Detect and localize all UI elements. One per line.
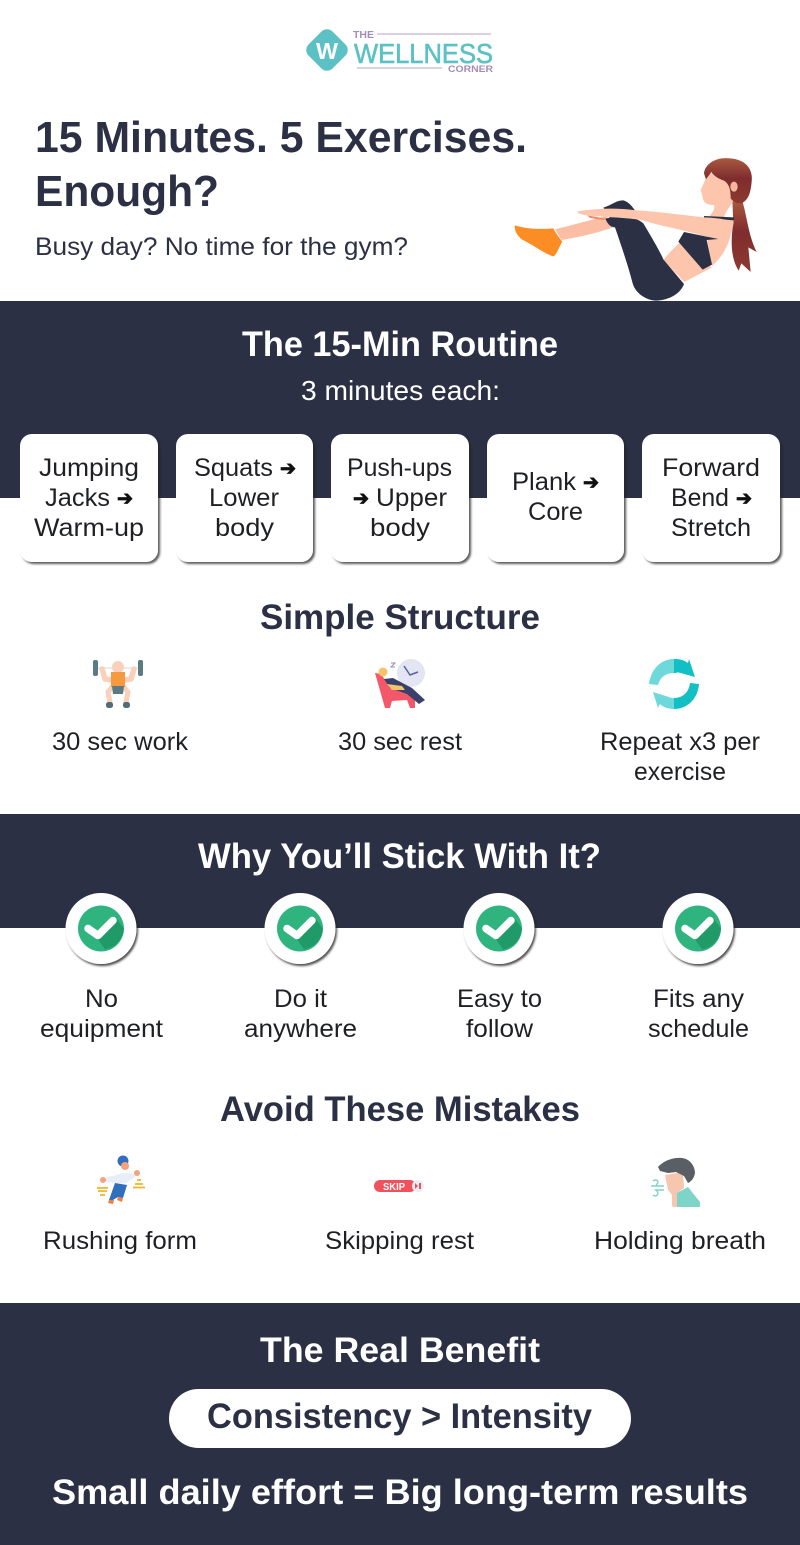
text: easy to follow: Easy to bbox=[457, 985, 542, 1013]
text: 30 sec work: 30 sec work bbox=[52, 728, 189, 756]
heading: The 15-Min Routine: The 15-Min Routine bbox=[242, 325, 558, 364]
card: squats: Squats bbox=[194, 454, 273, 482]
band: why stick bbox=[0, 814, 800, 928]
subtitle: Busy day? No time for the gym? bbox=[35, 233, 408, 261]
logo bbox=[303, 26, 494, 74]
heading: Avoid These Mistakes: Avoid These Mistakes bbox=[220, 1090, 580, 1129]
card: jumping jacks: Warm-up bbox=[34, 514, 144, 542]
text: holding breath: Holding breath bbox=[594, 1227, 766, 1255]
text: fits any schedule: Fits any bbox=[653, 985, 745, 1013]
icon: check badge 1 bbox=[66, 893, 136, 964]
text: do it anywhere: Do it bbox=[274, 985, 327, 1013]
band: benefit bbox=[0, 1303, 800, 1545]
card: push-ups bbox=[331, 434, 469, 562]
icon: skip button: SKIP bbox=[383, 1182, 405, 1193]
card: squats bbox=[176, 434, 313, 562]
logo wordmark: THE bbox=[353, 30, 374, 41]
heading: Why You'll Stick With It: Why You’ll Stick With It? bbox=[198, 837, 601, 876]
text: no equipment: No bbox=[85, 985, 118, 1013]
card: jumping jacks bbox=[20, 434, 158, 562]
card: jumping jacks: ➔ bbox=[117, 486, 133, 510]
card: push-ups: Upper bbox=[376, 484, 447, 512]
icon: weightlifter bbox=[93, 660, 143, 708]
heading: The Real Benefit: The Real Benefit bbox=[260, 1331, 540, 1370]
logo wordmark: CORNER bbox=[448, 64, 494, 74]
icon: check badge 4 bbox=[662, 893, 734, 964]
text: do it anywhere bbox=[244, 985, 357, 1043]
text: 3 minutes each: 3 minutes each: bbox=[301, 375, 500, 406]
card: forward bend: ➔ bbox=[736, 486, 752, 510]
card: plank: Core bbox=[528, 498, 583, 526]
card: forward bend: Bend bbox=[671, 484, 729, 512]
text: easy to follow: follow bbox=[466, 1015, 534, 1043]
card: push-ups: ➔ bbox=[353, 486, 369, 510]
icon: check badge 2 bbox=[264, 893, 336, 964]
text: fits any schedule bbox=[648, 985, 749, 1043]
icon: logo diamond bbox=[303, 26, 351, 74]
card: squats: Lower bbox=[209, 484, 279, 512]
illustration: woman doing v-sit bbox=[515, 158, 757, 301]
logo wordmark bbox=[353, 30, 494, 74]
card: squats: ➔ bbox=[280, 456, 296, 480]
card: squats: body bbox=[215, 514, 275, 542]
text: conclusion: Small daily effort = Big long-term results bbox=[52, 1473, 748, 1512]
card: forward bend: Stretch bbox=[671, 514, 751, 542]
text: skipping rest: Skipping rest bbox=[325, 1227, 474, 1255]
icon: rushing runner bbox=[97, 1156, 145, 1204]
card: forward bend: Forward bbox=[662, 454, 760, 482]
text: repeat x3 per exercise: exercise bbox=[634, 758, 726, 786]
text: rushing form: Rushing form bbox=[43, 1227, 197, 1255]
title: Enough? bbox=[35, 167, 219, 216]
icon: holding breath bbox=[651, 1158, 700, 1207]
pill: consistency over intensity bbox=[169, 1389, 631, 1448]
heading: Simple Structure: Simple Structure bbox=[260, 598, 540, 637]
icon: check badge 3 bbox=[464, 893, 534, 964]
card: plank: Plank bbox=[512, 468, 577, 496]
card: plank bbox=[487, 434, 624, 562]
icon: skip button bbox=[374, 1180, 424, 1193]
card: push-ups: Push-ups bbox=[347, 454, 452, 482]
card: jumping jacks: Jacks bbox=[45, 484, 110, 512]
text: easy to follow bbox=[457, 985, 542, 1043]
logo wordmark: WELLNESS bbox=[354, 38, 493, 69]
text: repeat x3 per exercise: Repeat x3 per bbox=[600, 728, 760, 756]
text: repeat x3 per exercise bbox=[600, 728, 760, 786]
icon: logo diamond: W bbox=[316, 38, 338, 64]
text: no equipment: equipment bbox=[40, 1015, 163, 1043]
title bbox=[35, 113, 527, 216]
icon: resting in chair with clock bbox=[375, 659, 425, 708]
icon: repeat arrows bbox=[649, 659, 699, 709]
text: 30 sec rest: 30 sec rest bbox=[338, 728, 462, 756]
text: fits any schedule: schedule bbox=[648, 1015, 749, 1043]
pill: consistency over intensity: Consistency > Intensity bbox=[207, 1397, 593, 1436]
text: do it anywhere: anywhere bbox=[244, 1015, 357, 1043]
card: jumping jacks: Jumping bbox=[39, 454, 139, 482]
card: forward bend bbox=[642, 434, 780, 562]
card: push-ups: body bbox=[370, 514, 431, 542]
title: 15 Minutes. 5 Exercises. bbox=[35, 113, 527, 162]
text: no equipment bbox=[40, 985, 163, 1043]
band: routine bbox=[0, 301, 800, 498]
card: plank: ➔ bbox=[583, 470, 599, 494]
